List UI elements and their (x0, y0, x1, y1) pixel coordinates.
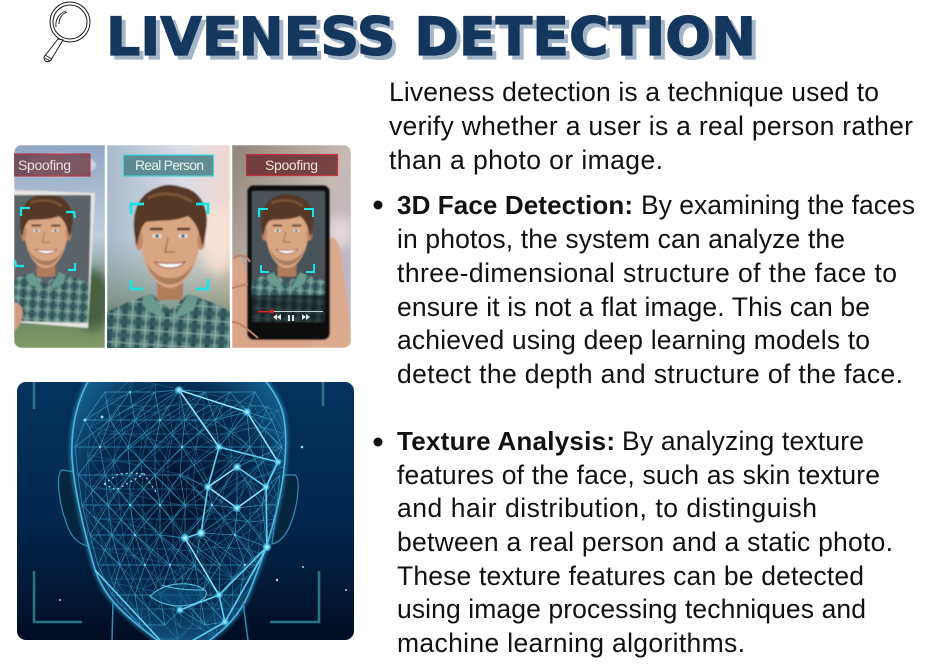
bullet: texture analysis: features of the face, such as skin texture (397, 460, 880, 490)
bullet: texture analysis (374, 426, 893, 658)
label: spoofing right: Spoofing (265, 157, 318, 173)
bullet: texture analysis: machine learning algorithms. (397, 628, 745, 658)
photo: real person (107, 145, 230, 348)
bullet: texture analysis: using image processing techniques and (397, 594, 866, 624)
icon: magnifying glass (44, 2, 90, 62)
corner brackets (34, 382, 323, 622)
bullet: 3D face detection: three-dimensional structure of the face to (397, 258, 897, 288)
intro paragraph: verify whether a user is a real person rather (389, 111, 913, 141)
intro paragraph: Liveness detection is a technique used to (389, 77, 879, 107)
panel: spoofing and real person photo comparison (14, 145, 351, 348)
photo: spoofing with a phone (232, 145, 351, 348)
intro paragraph: than a photo or image. (389, 145, 663, 175)
label: real person (124, 155, 214, 176)
label: spoofing left: Spoofing (18, 157, 71, 173)
photo: spoofing with a printed photo (14, 145, 105, 348)
bullet: 3D face detection: 3D Face Detection: (397, 190, 633, 220)
bright landmark lines (95, 390, 278, 642)
title: LIVENESS DETECTION (106, 7, 756, 68)
left eye dots (104, 473, 156, 492)
bullet: 3D face detection: in photos, the system can analyze the (397, 224, 845, 254)
bullet: texture analysis: These texture features can be detected (397, 561, 864, 591)
label: real person: Real Person (135, 157, 204, 173)
video progress bar (258, 310, 323, 321)
bullet: texture analysis: and hair distribution, to distinguish (397, 493, 817, 523)
bullet: texture analysis: By analyzing texture (622, 426, 864, 456)
bullet: 3D face detection: ensure it is not a flat image. This can be (397, 292, 870, 322)
bullet: texture analysis: Texture Analysis: (397, 426, 615, 456)
bullet: 3D face detection: By examining the faces (641, 190, 915, 220)
panel: face mesh illustration (17, 371, 354, 644)
bullet: texture analysis: between a real person and a static photo. (397, 527, 893, 557)
bullet: 3D face detection: achieved using deep learning models to (397, 325, 870, 355)
bullet: 3D face detection: detect the depth and structure of the face. (397, 359, 903, 389)
label: spoofing left (6, 154, 90, 176)
face mesh head (53, 371, 347, 644)
landmark dots (176, 388, 280, 624)
intro paragraph (389, 77, 913, 175)
small mesh dots (59, 391, 347, 601)
label: spoofing right (246, 154, 338, 176)
bullet: 3D face detection (374, 190, 915, 389)
mouth outline (150, 584, 206, 606)
title: LIVENESS DETECTION (110, 11, 760, 72)
